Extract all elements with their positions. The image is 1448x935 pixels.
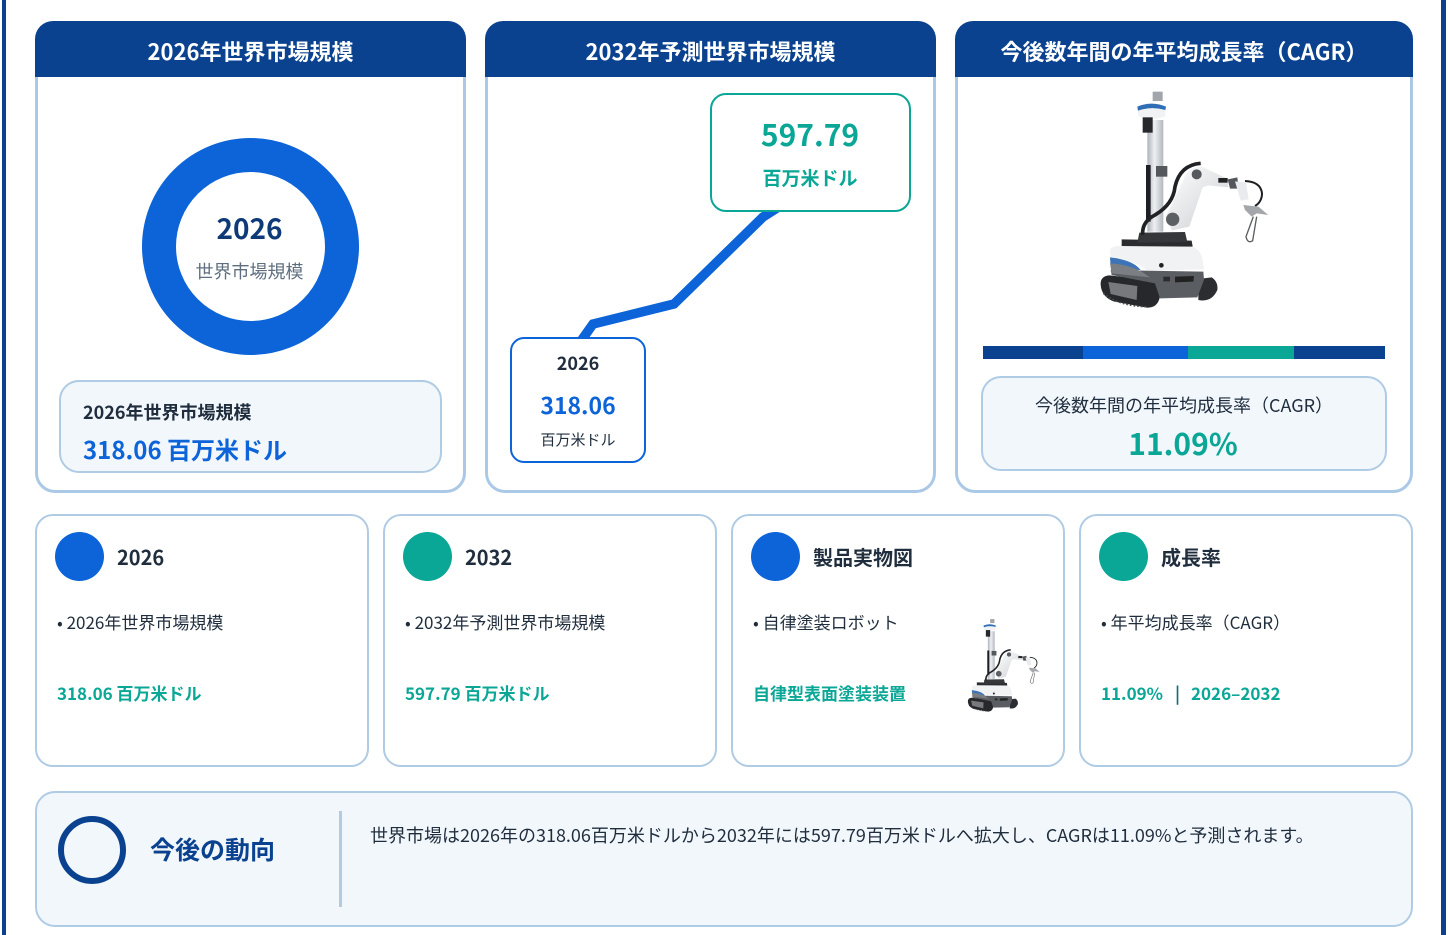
bullet: • 自律塗装ロボット: [753, 609, 899, 634]
callout: 2026 value: [510, 337, 646, 463]
bullet: • 年平均成長率（CAGR）: [1101, 609, 1290, 634]
value: 自律型表面塗装装置: [753, 680, 906, 705]
segmented color bar: [983, 346, 1385, 359]
page frame right bar: [1441, 0, 1446, 935]
panel: CAGR: [955, 21, 1413, 493]
outlook text: 世界市場は2026年の318.06百万米ドルから2032年には597.79百万米ドルへ拡大し、CAGRは11.09%と予測されます。: [370, 822, 1314, 848]
panel body: [485, 21, 936, 493]
callout: 2032 value: [710, 93, 911, 212]
value: 11.09%: [1101, 680, 1163, 705]
panel heading: [955, 21, 1413, 77]
panel heading: 2032年予測世界市場規模: [586, 35, 835, 67]
icon: blue circle: [751, 532, 800, 581]
summary label: 2026年世界市場規模: [83, 399, 251, 425]
card: 2032: [383, 514, 717, 767]
outlook heading: 今後の動向: [150, 831, 275, 867]
CAGR box: [981, 376, 1387, 471]
panel heading: 2026年世界市場規模: [148, 35, 353, 67]
card heading: 2032: [465, 542, 512, 571]
icon: blue circle: [55, 532, 104, 581]
card heading: 2026: [117, 542, 164, 571]
growth line: [578, 212, 780, 337]
card: product: [731, 514, 1065, 767]
panel: 2032 forecast: [485, 21, 936, 493]
card heading: 成長率: [1161, 542, 1221, 571]
panel heading: [35, 21, 466, 77]
value: 597.79: [761, 111, 859, 155]
page frame left bar: [2, 0, 6, 935]
icon: robot: [1100, 92, 1268, 308]
panel body: [35, 21, 466, 493]
CAGR label: 今後数年間の年平均成長率（CAGR）: [1035, 392, 1333, 418]
bullet: • 2032年予測世界市場規模: [405, 609, 605, 634]
unit: 百万米ドル: [762, 164, 858, 191]
card: growth rate: 2026–2032: [1191, 680, 1280, 705]
card: growth rate: [1079, 514, 1413, 767]
donut label: 世界市場規模: [196, 258, 304, 284]
left track: [1101, 275, 1160, 308]
panel: 2026 market size: [35, 21, 466, 493]
icon: teal circle: [1099, 532, 1148, 581]
panel heading: [485, 21, 936, 77]
card: growth rate: |: [1175, 680, 1180, 705]
summary box: [59, 380, 442, 473]
panel: outlook: [35, 791, 1413, 927]
donut year: 2026: [216, 208, 283, 248]
bullet: • 2026年世界市場規模: [57, 609, 223, 634]
icon: small robot: [968, 619, 1040, 712]
donut chart: [142, 138, 359, 355]
summary value: 318.06 百万米ドル: [83, 431, 287, 466]
CAGR value: 11.09%: [1128, 420, 1238, 464]
year: 2026: [557, 350, 599, 376]
card: 2026: [35, 514, 369, 767]
right track: [1198, 277, 1217, 300]
value: [1101, 680, 1280, 705]
icon: teal circle: [403, 532, 452, 581]
panel body: [955, 21, 1413, 493]
divider: [339, 811, 342, 907]
card heading: 製品実物図: [813, 542, 913, 571]
value: 318.06: [540, 387, 616, 421]
value: 318.06 百万米ドル: [57, 680, 202, 705]
unit: 百万米ドル: [540, 429, 616, 450]
panel heading: 今後数年間の年平均成長率（CAGR）: [1000, 35, 1368, 67]
value: 597.79 百万米ドル: [405, 680, 550, 705]
icon: ring: [58, 816, 126, 884]
